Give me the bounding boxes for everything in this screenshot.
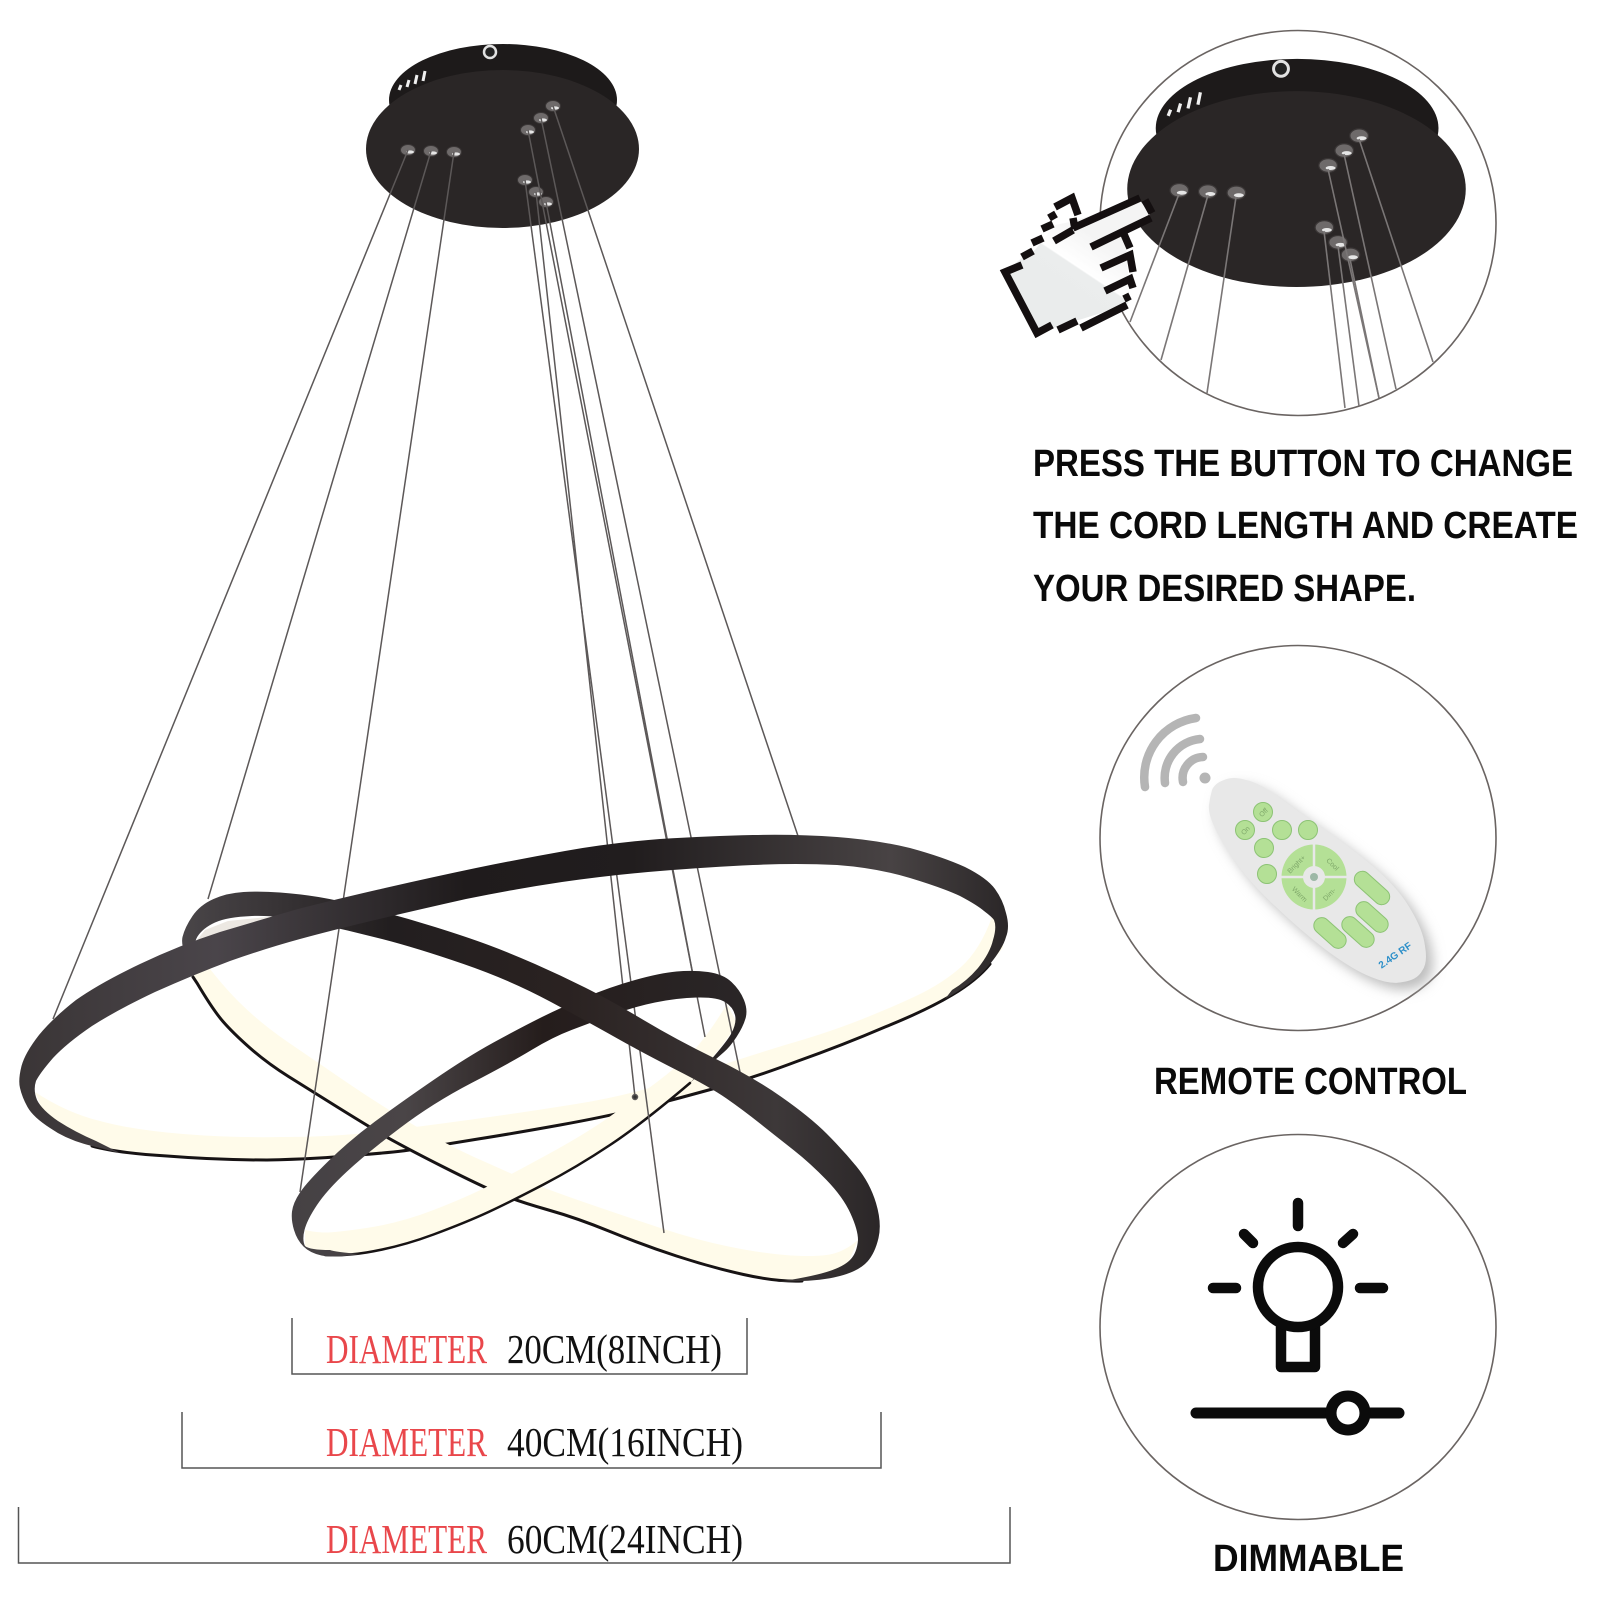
remote direction pad <box>1279 842 1349 912</box>
small ring, lower glowing part <box>305 1004 737 1255</box>
dimension: 40cm bracket: 40CM(16INCH) <box>507 1419 743 1465</box>
remote direction pad: Warm <box>1290 886 1308 904</box>
remote pill buttons <box>1311 868 1393 952</box>
large ring, lower glowing part <box>35 917 1003 1160</box>
icon: dimmable bulb <box>1213 1203 1383 1367</box>
icon: dimmer slider <box>1196 1396 1399 1430</box>
dimension: 20cm bracket: DIAMETER <box>326 1326 487 1372</box>
dimension: 60cm bracket: DIAMETER <box>326 1516 487 1562</box>
panel: adjustable cord inset <box>1005 30 1496 416</box>
dimmable label: DIMMABLE <box>1213 1538 1404 1580</box>
remote brand label: 2.4G RF <box>1377 941 1414 971</box>
small ring, dark upper band <box>292 971 746 1256</box>
dimension: 20cm bracket <box>292 1318 747 1374</box>
dimension: 20cm bracket: 20CM(8INCH) <box>507 1326 722 1372</box>
large ring, dark upper band <box>19 835 1008 1153</box>
inset canopy close-up <box>1127 59 1466 287</box>
suspension cords <box>53 106 798 1233</box>
instruction text: YOUR DESIRED SHAPE. <box>1033 568 1416 610</box>
icon: pixel pointing hand <box>1005 198 1152 333</box>
panel: dimmable <box>1100 1134 1496 1520</box>
dimension: 60cm bracket: 60CM(24INCH) <box>507 1516 743 1562</box>
remote power labels <box>1240 807 1270 837</box>
panel: remote control <box>1100 646 1496 1030</box>
remote direction pad: Dim- <box>1322 887 1338 903</box>
middle ring, lower glowing part <box>192 916 858 1281</box>
ceiling canopy <box>366 44 639 228</box>
middle ring, dark upper band <box>182 892 880 1282</box>
dimension: 40cm bracket: DIAMETER <box>326 1419 487 1465</box>
remote direction pad: Bright+ <box>1287 855 1307 875</box>
panel: chandelier <box>19 44 1008 1282</box>
dimension: 40cm bracket <box>182 1412 881 1468</box>
remote control label: REMOTE CONTROL <box>1154 1061 1467 1103</box>
inset cords <box>1130 139 1433 408</box>
remote power labels: On <box>1240 825 1252 837</box>
remote direction pad: Cool <box>1324 857 1340 873</box>
dimension: 60cm bracket <box>18 1507 1010 1563</box>
instruction text <box>1033 443 1578 610</box>
remote handset <box>1209 778 1433 990</box>
remote power labels: Off <box>1258 807 1270 819</box>
icon: wireless signal <box>1144 718 1210 787</box>
remote round buttons <box>1236 802 1318 884</box>
